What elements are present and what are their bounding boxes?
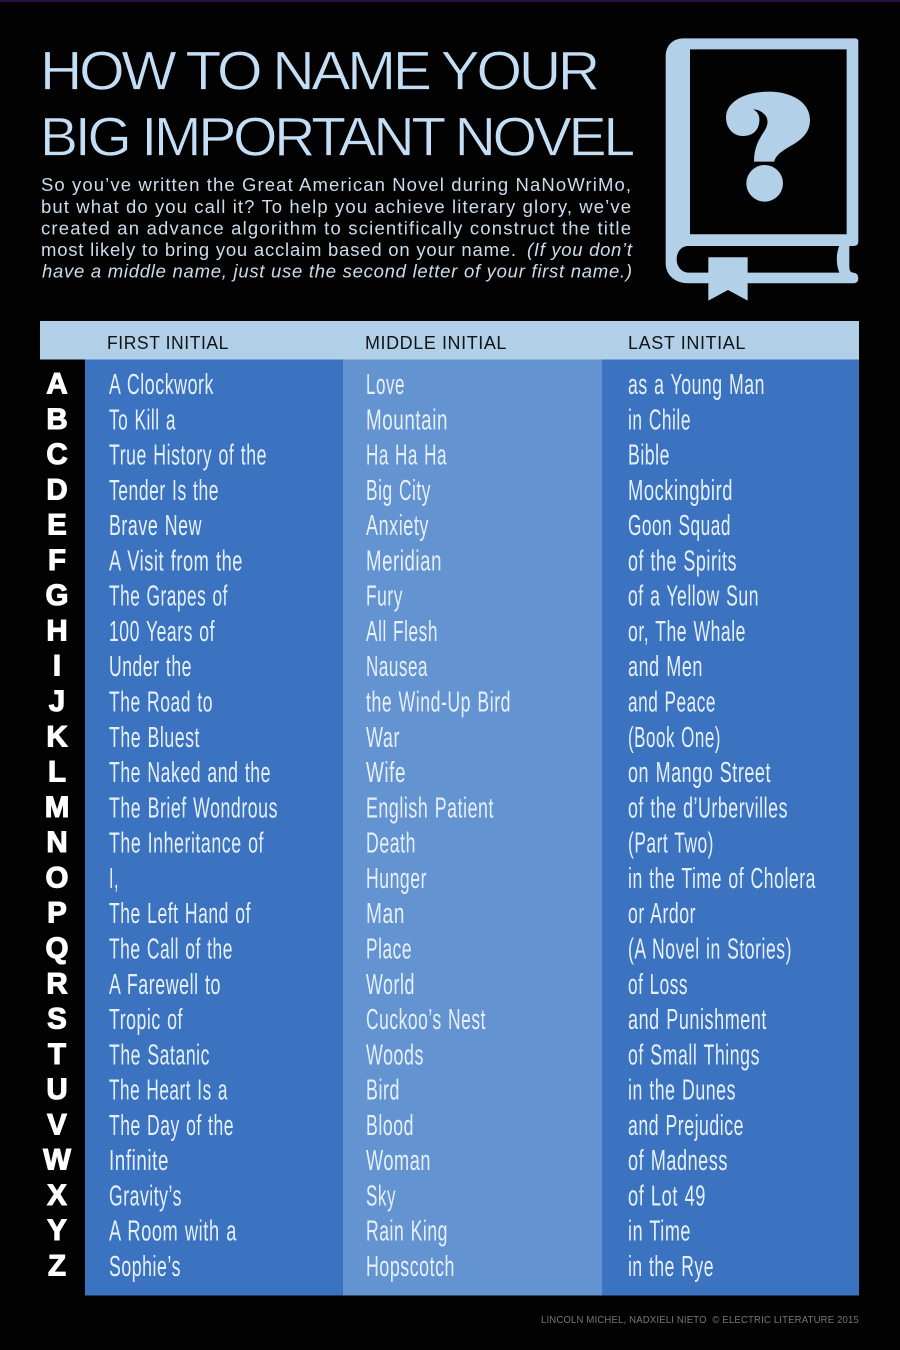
- panel: first initial column: I,: [109, 863, 119, 895]
- panel: first initial column: A Farewell to: [109, 969, 221, 1001]
- alphabet letters column: B: [46, 403, 68, 436]
- panel: middle initial column: Sky: [366, 1180, 396, 1212]
- panel: middle initial column: Cuckoo’s Nest: [366, 1004, 486, 1036]
- panel: first initial column: A Clockwork: [109, 369, 214, 401]
- panel: first initial column: Under the: [109, 651, 192, 683]
- alphabet letters column: G: [46, 579, 68, 612]
- panel: first initial column: The Call of the: [109, 934, 233, 966]
- panel: last initial column: and Men: [628, 651, 703, 683]
- panel: first initial column: [85, 360, 343, 1296]
- alphabet letters column: Y: [47, 1214, 67, 1247]
- panel: middle initial column: Rain King: [366, 1216, 448, 1248]
- alphabet letters column: Z: [48, 1250, 66, 1282]
- intro text block: [41, 174, 633, 282]
- panel: last initial column: in Chile: [628, 404, 691, 436]
- panel: middle initial column: War: [366, 722, 400, 754]
- table header bar: LAST INITIAL: [628, 333, 746, 353]
- panel: middle initial column: Fury: [366, 581, 403, 613]
- panel: first initial column: To Kill a: [109, 404, 176, 436]
- panel: first initial column: True History of the: [109, 440, 267, 472]
- panel: last initial column: and Punishment: [628, 1004, 767, 1036]
- icon: question mark: [726, 92, 810, 202]
- panel: last initial column: in the Rye: [628, 1251, 714, 1283]
- panel: last initial column: (A Novel in Stories): [628, 934, 792, 966]
- panel: first initial column: The Heart Is a: [109, 1075, 228, 1107]
- panel: middle initial column: Death: [366, 828, 416, 860]
- panel: middle initial column: Place: [366, 934, 412, 966]
- panel: last initial column: [602, 360, 859, 1296]
- panel: middle initial column: Hopscotch: [366, 1251, 455, 1283]
- intro text block: created an advance algorithm to scientifically construct the title: [41, 218, 631, 238]
- panel: first initial column: The Satanic: [109, 1039, 210, 1071]
- alphabet letters column: [43, 368, 71, 1282]
- panel: middle initial column: [343, 360, 602, 1296]
- panel: first initial column: The Bluest: [109, 722, 200, 754]
- alphabet letters column: L: [48, 756, 66, 789]
- alphabet letters column: F: [48, 544, 66, 577]
- footer credit: LINCOLN MICHEL, NADXIELI NIETO © ELECTRIC LITERATURE 2015: [541, 1314, 859, 1326]
- panel: last initial column: of Madness: [628, 1145, 728, 1177]
- panel: last initial column: Mockingbird: [628, 475, 733, 507]
- panel: first initial column: Sophie’s: [109, 1251, 181, 1283]
- alphabet letters column: E: [47, 509, 67, 542]
- panel: last initial column: (Book One): [628, 722, 721, 754]
- intro text block: but what do you call it? To help you achieve literary glory, we’ve: [41, 196, 631, 217]
- panel: first initial column: Tropic of: [109, 1004, 183, 1036]
- panel: first initial column: The Inheritance of: [109, 828, 264, 860]
- panel: middle initial column: Bird: [366, 1075, 400, 1107]
- panel: middle initial column: English Patient: [366, 792, 494, 824]
- alphabet letters column: S: [47, 1002, 67, 1036]
- panel: last initial column: on Mango Street: [628, 757, 771, 789]
- panel: last initial column: and Peace: [628, 686, 716, 718]
- panel: last initial column: in Time: [628, 1216, 691, 1248]
- panel: middle initial column: Hunger: [366, 863, 427, 895]
- alphabet letters column: C: [46, 438, 68, 471]
- intro text block: (If you don’t: [527, 239, 633, 260]
- panel: last initial column: of Small Things: [628, 1039, 760, 1071]
- alphabet letters column: K: [46, 720, 68, 753]
- panel: middle initial column: Woman: [366, 1145, 431, 1177]
- title: [40, 40, 633, 168]
- panel: middle initial column: Meridian: [366, 545, 442, 577]
- alphabet letters column: P: [47, 897, 67, 930]
- alphabet letters column: M: [45, 791, 69, 824]
- alphabet letters column: D: [46, 473, 68, 506]
- panel: first initial column: 100 Years of: [109, 616, 215, 648]
- alphabet letters column: A: [46, 368, 68, 400]
- panel: middle initial column: Wife: [366, 757, 406, 789]
- panel: middle initial column: All Flesh: [366, 616, 438, 648]
- panel: first initial column: A Room with a: [109, 1216, 237, 1248]
- intro text block: have a middle name, just use the second letter of your first name.): [42, 260, 632, 282]
- panel: first initial column: The Day of the: [109, 1110, 234, 1142]
- panel: middle initial column: the Wind-Up Bird: [366, 686, 511, 718]
- alphabet letters column: U: [46, 1073, 68, 1106]
- panel: middle initial column: Blood: [366, 1110, 414, 1142]
- panel: last initial column: or Ardor: [628, 898, 696, 930]
- panel: first initial column: Brave New: [109, 510, 202, 542]
- alphabet letters column: V: [47, 1108, 67, 1141]
- alphabet letters column: T: [48, 1038, 66, 1071]
- panel: last initial column: Goon Squad: [628, 510, 731, 542]
- panel: middle initial column: Mountain: [366, 404, 448, 436]
- panel: last initial column: in the Dunes: [628, 1075, 736, 1107]
- table header bar: [40, 321, 859, 360]
- panel: middle initial column: Woods: [366, 1039, 424, 1071]
- panel: last initial column: of the d’Urbervilles: [628, 792, 788, 824]
- icon: book with question mark: [666, 38, 858, 301]
- panel: last initial column: (Part Two): [628, 828, 714, 860]
- panel: first initial column: The Naked and the: [109, 757, 271, 789]
- title: BIG IMPORTANT NOVEL: [40, 106, 633, 168]
- panel: first initial column: A Visit from the: [109, 545, 243, 577]
- table header bar: MIDDLE INITIAL: [365, 333, 507, 353]
- alphabet letters column: N: [46, 826, 68, 859]
- alphabet letters column: X: [47, 1179, 67, 1212]
- panel: last initial column: and Prejudice: [628, 1110, 744, 1142]
- panel: middle initial column: Ha Ha Ha: [366, 440, 447, 472]
- intro text block: So you’ve written the Great American Novel during NaNoWriMo,: [41, 174, 631, 195]
- panel: middle initial column: Nausea: [366, 651, 428, 683]
- panel: middle initial column: Man: [366, 898, 405, 930]
- alphabet letters column: O: [46, 861, 68, 894]
- alphabet letters column: Q: [46, 932, 68, 965]
- panel: middle initial column: Anxiety: [366, 510, 429, 542]
- panel: last initial column: or, The Whale: [628, 616, 746, 648]
- alphabet letters column: W: [43, 1144, 71, 1177]
- alphabet letters column: J: [49, 685, 65, 718]
- title: HOW TO NAME YOUR: [40, 40, 598, 102]
- panel: first initial column: The Brief Wondrous: [109, 792, 278, 824]
- panel: first initial column: The Left Hand of: [109, 898, 251, 930]
- alphabet letters column: I: [53, 650, 61, 683]
- panel: first initial column: Infinite: [109, 1145, 169, 1177]
- alphabet letters column: H: [46, 614, 68, 648]
- panel: last initial column: as a Young Man: [628, 369, 765, 401]
- panel: last initial column: Bible: [628, 440, 670, 472]
- alphabet letters column: R: [46, 967, 68, 1000]
- panel: first initial column: The Road to: [109, 686, 213, 718]
- icon: bookmark: [708, 257, 748, 301]
- table header bar: FIRST INITIAL: [107, 333, 229, 353]
- panel: last initial column: of Loss: [628, 969, 688, 1001]
- panel: last initial column: of Lot 49: [628, 1180, 706, 1212]
- panel: first initial column: Gravity’s: [109, 1180, 182, 1212]
- panel: last initial column: of the Spirits: [628, 545, 737, 577]
- panel: last initial column: of a Yellow Sun: [628, 581, 759, 613]
- panel: middle initial column: World: [366, 969, 415, 1001]
- panel: first initial column: The Grapes of: [109, 581, 228, 613]
- panel: first initial column: Tender Is the: [109, 475, 219, 507]
- intro text block: most likely to bring you acclaim based on your name.: [41, 239, 516, 260]
- panel: middle initial column: Big City: [366, 475, 431, 507]
- panel: middle initial column: Love: [366, 369, 405, 401]
